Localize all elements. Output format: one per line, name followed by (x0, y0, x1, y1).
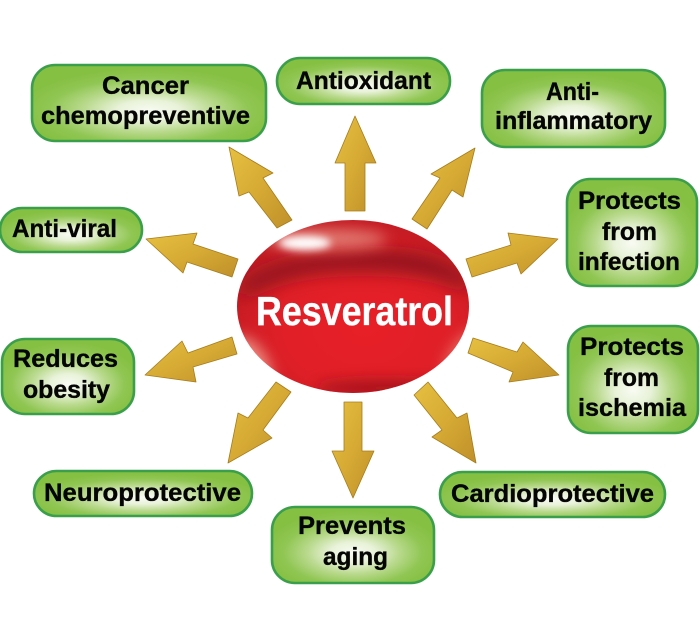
box: Cardioprotective (440, 472, 665, 517)
box: Neuroprotective: Neuroprotective (44, 479, 241, 507)
box: Protects from ischemia (568, 326, 698, 433)
arrow: to Antioxidant (335, 116, 376, 211)
box: Cancer chemopreventive (32, 65, 266, 141)
arrow: to Cardioprotective (414, 382, 476, 463)
box: Protects from ischemia: Protects (580, 333, 684, 361)
box: Anti-inflammatory: inflammatory (495, 107, 652, 135)
box: Neuroprotective (34, 471, 252, 516)
box: Antioxidant (277, 58, 450, 104)
box: Protects from ischemia: from (604, 364, 659, 392)
arrow: to Cancer chemopreventive (229, 147, 292, 228)
box: Prevents aging: aging (323, 543, 388, 571)
box: Prevents aging (272, 507, 434, 583)
box: Reduces obesity: Reduces (13, 345, 118, 373)
box: Cardioprotective: Cardioprotective (451, 480, 654, 508)
arrow: to Anti-inflammatory (412, 148, 475, 229)
box: Anti-inflammatory: Anti- (546, 78, 599, 106)
box: Antioxidant: Antioxidant (296, 67, 432, 95)
central red ellipse: Resveratrol (237, 220, 469, 393)
box: Cancer chemopreventive: Cancer (102, 72, 189, 100)
box: Protects from infection (567, 179, 697, 286)
box: Anti-inflammatory (482, 70, 665, 147)
box: Protects from infection: from (602, 218, 657, 246)
box: Protects from infection: infection (578, 248, 680, 276)
box: Anti-viral: Anti-viral (12, 215, 117, 243)
box: Protects from ischemia: ischemia (578, 394, 687, 422)
box: Reduces obesity (2, 339, 134, 414)
arrow: to Protects from ischemia (468, 338, 559, 382)
arrow: to Neuroprotective (228, 382, 291, 463)
box: Reduces obesity: obesity (23, 376, 110, 404)
box: Anti-viral (0, 208, 142, 252)
box: Protects from infection: Protects (578, 187, 681, 215)
arrow: to Reduces obesity (145, 337, 237, 382)
arrow: to Anti-viral (146, 233, 238, 277)
box: Cancer chemopreventive: chemopreventive (41, 102, 250, 130)
title: Resveratrol: Resveratrol (256, 288, 453, 334)
arrow: to Protects from infection (466, 233, 558, 277)
box: Prevents aging: Prevents (298, 512, 406, 540)
arrow: to Prevents aging (332, 402, 374, 498)
